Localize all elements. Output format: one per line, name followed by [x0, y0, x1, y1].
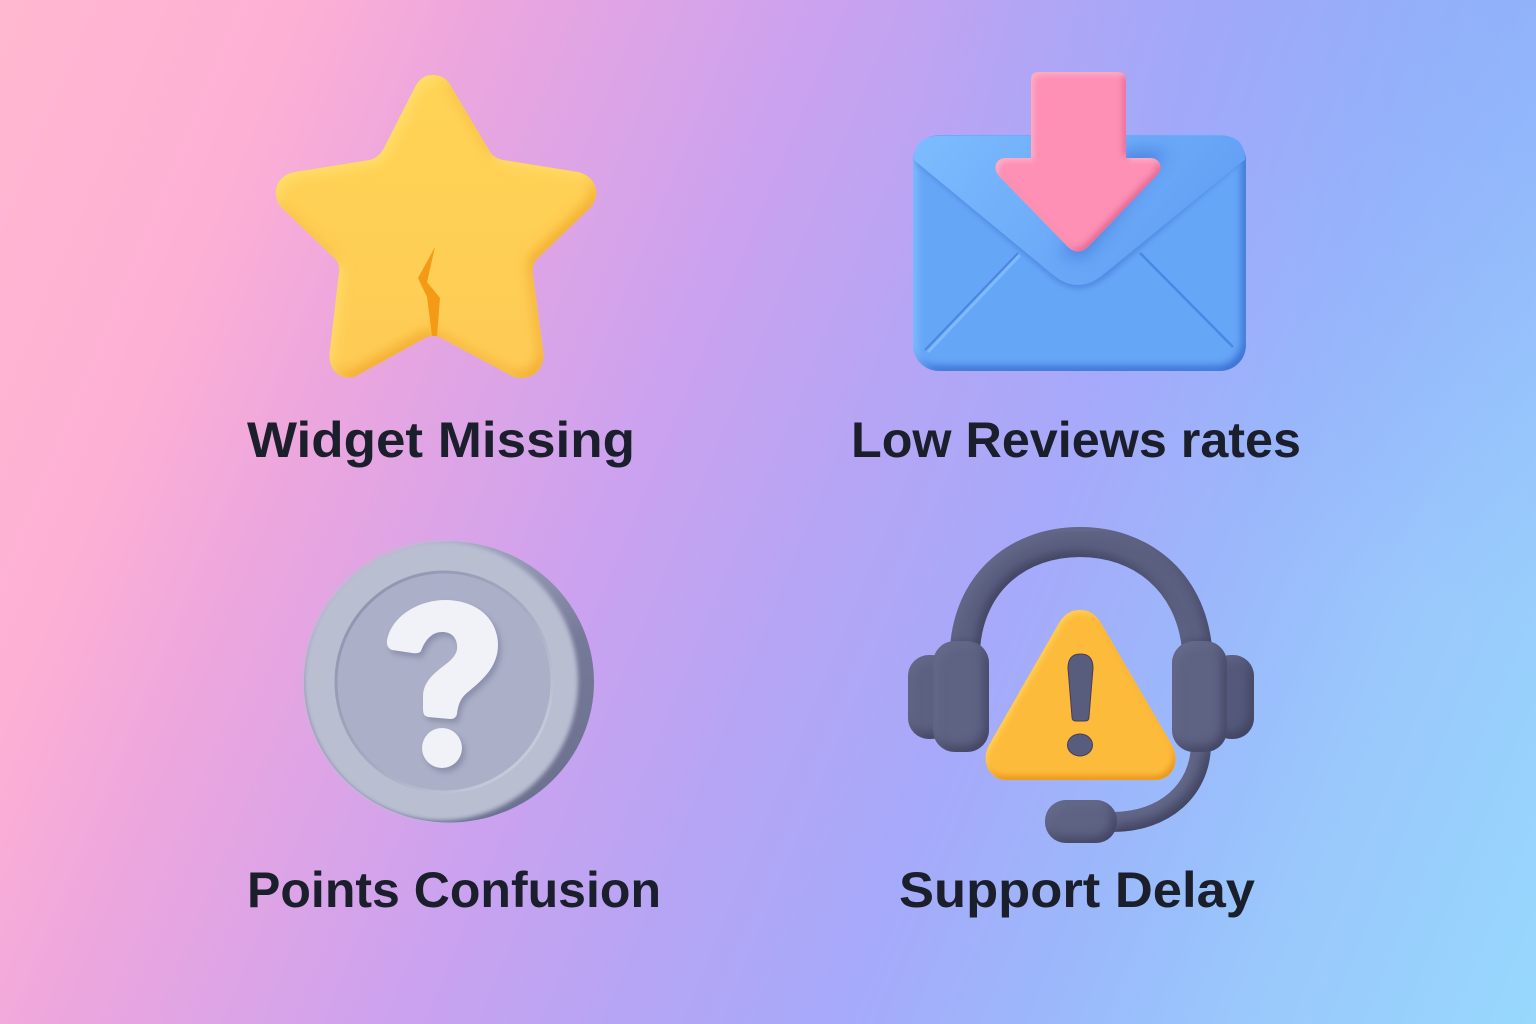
- question mark shadow: [390, 604, 501, 772]
- icon: headset with warning triangle: [908, 542, 1254, 843]
- warning triangle: [986, 610, 1176, 780]
- exclamation mark: [1068, 654, 1093, 756]
- label: Widget Missing: Widget Missing: [247, 412, 635, 468]
- question mark: [387, 600, 498, 768]
- label: Points Confusion: Points Confusion: [247, 862, 661, 918]
- icon: question mark coin: [304, 542, 594, 822]
- label: Low Reviews rates: Low Reviews rates: [851, 412, 1301, 468]
- down arrow: [995, 72, 1161, 252]
- label: Support Delay: Support Delay: [899, 862, 1255, 918]
- icon: cracked star: [276, 75, 596, 378]
- icon: envelope with down arrow: [913, 72, 1246, 371]
